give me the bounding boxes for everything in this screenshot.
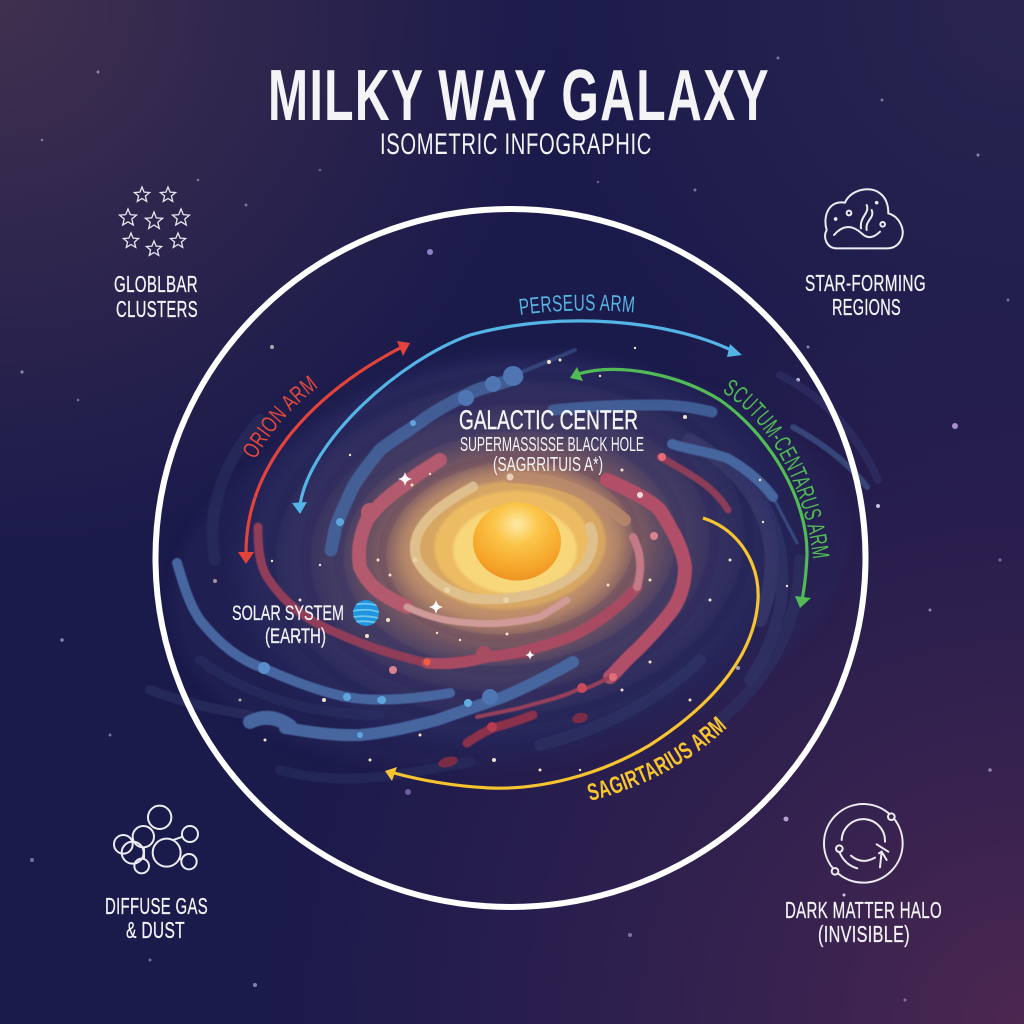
label: DARK MATTER HALO [785,897,942,923]
arrow: orion arm [238,341,410,564]
label: REGIONS [832,294,901,320]
label: sagittarius arm: SAGIRTARIUS ARM [588,716,727,800]
blue arm lumps [258,366,523,738]
label [114,271,198,322]
title: MILKY WAY GALAXY [268,56,770,136]
label: solar system: (EARTH) [265,625,326,648]
panel: dark matter halo [785,804,942,947]
red spiral arms [258,457,728,743]
label: galactic center: SUPERMASSISSE BLACK HOLE [460,434,644,456]
subtitle: ISOMETRIC INFOGRAPHIC [380,128,652,161]
arrow: sagittarius arm [385,518,758,788]
label [805,270,926,320]
icon: bubbles [114,806,198,873]
label [785,897,942,947]
panel: globular clusters [114,187,198,322]
panel: star-forming regions [805,189,926,320]
blue spiral arms [177,350,867,735]
label: galactic center [459,405,644,476]
arrow: scutum-centaurus arm [570,367,811,608]
label: solar system [232,602,344,648]
label: (INVISIBLE) [818,921,910,947]
label: DIFFUSE GAS [105,893,208,919]
panel: diffuse gas and dust [105,806,208,943]
label: scutum-centaurus arm: SCUTUM-CENTARUS ARM [724,380,830,558]
label: perseus arm: PERSEUS ARM [519,294,634,315]
red arm lumps [361,453,666,769]
boundary ring [156,209,866,907]
label: orion arm: ORION ARM [244,375,318,457]
icon: cloud [825,189,903,248]
galaxy [146,316,878,810]
label: & DUST [126,917,185,943]
arrow: perseus arm [292,321,742,514]
core rings [393,461,627,629]
sparkle stars [398,472,535,660]
label: galactic center: (SAGRRITUIS A*) [493,454,603,476]
label: GLOBLBAR [114,271,198,297]
icon: stars [120,187,190,255]
label [105,893,208,943]
label: solar system: SOLAR SYSTEM [232,602,344,625]
label: CLUSTERS [116,296,198,322]
label: STAR-FORMING [805,270,926,296]
icon: earth [353,600,379,626]
icon: halo [824,804,903,883]
small galaxy stars [213,347,788,772]
galactic core sphere [473,502,561,580]
disk glow [200,316,820,784]
label: galactic center: GALACTIC CENTER [459,405,638,435]
dark swirl bands [150,352,878,779]
outer haze [146,330,874,810]
pale inner arm [415,487,593,599]
